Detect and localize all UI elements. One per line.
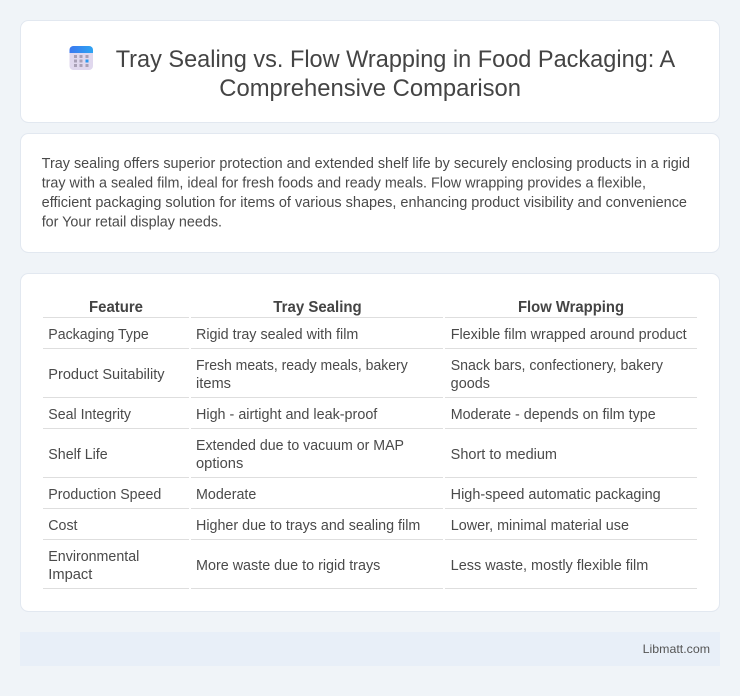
row: cost: Higher due to trays and sealing film bbox=[196, 518, 420, 534]
row: shelf life: Short to medium bbox=[451, 447, 557, 463]
row: cost: Cost bbox=[48, 518, 78, 534]
footer text: Libmatt.com bbox=[643, 642, 710, 656]
row: production speed bbox=[43, 487, 697, 509]
row: packaging type: Flexible film wrapped around product bbox=[451, 327, 687, 343]
panel: comparison table bbox=[20, 274, 720, 612]
row: cost: Lower, minimal material use bbox=[451, 518, 629, 534]
row: cost bbox=[43, 518, 697, 540]
icon: calendar bbox=[70, 46, 93, 70]
row: production speed: Production Speed bbox=[48, 487, 161, 503]
row: packaging type bbox=[43, 327, 697, 349]
text block: introduction: for Your retail display needs. bbox=[42, 214, 222, 230]
panel: footer bbox=[20, 632, 720, 666]
row: seal integrity bbox=[43, 407, 697, 429]
row: environmental impact: Environmental bbox=[48, 549, 139, 565]
row: packaging type: Rigid tray sealed with film bbox=[196, 327, 358, 343]
row: environmental impact: Less waste, mostly flexible film bbox=[451, 558, 648, 574]
row: product suitability: Fresh meats, ready meals, bakery bbox=[196, 358, 408, 374]
text block: introduction bbox=[42, 156, 690, 230]
row: seal integrity: Seal Integrity bbox=[48, 407, 132, 423]
table header: Flow Wrapping bbox=[518, 299, 624, 316]
table header bbox=[43, 299, 697, 318]
table header: Feature bbox=[89, 299, 143, 316]
title bbox=[116, 46, 675, 102]
text block: introduction: efficient packaging solution for items of various shapes, enhancing product visibility and convenience bbox=[42, 195, 687, 211]
panel: introduction bbox=[20, 134, 720, 252]
row: seal integrity: High - airtight and leak-proof bbox=[196, 407, 378, 423]
row: environmental impact: Impact bbox=[48, 567, 92, 583]
row: shelf life: Shelf Life bbox=[48, 447, 108, 463]
row: production speed: Moderate bbox=[196, 487, 256, 503]
row: shelf life bbox=[43, 438, 697, 478]
row: product suitability: goods bbox=[451, 376, 490, 392]
row: packaging type: Packaging Type bbox=[48, 327, 149, 343]
panel: header bbox=[20, 20, 720, 122]
row: shelf life: Extended due to vacuum or MAP bbox=[196, 438, 404, 454]
row: environmental impact: More waste due to rigid trays bbox=[196, 558, 380, 574]
text block: introduction: Tray sealing offers superior protection and extended shelf life by securely enclosing products in a rigid bbox=[42, 156, 690, 172]
row: production speed: High-speed automatic packaging bbox=[451, 487, 661, 503]
text block: introduction: tray with a sealed film, ideal for fresh foods and ready meals. Flow wrapping provides a flexible, bbox=[42, 176, 646, 192]
row: product suitability: Product Suitability bbox=[48, 367, 165, 383]
title: Comprehensive Comparison bbox=[219, 75, 521, 102]
table header: Tray Sealing bbox=[273, 299, 362, 316]
row: product suitability: Snack bars, confectionery, bakery bbox=[451, 358, 664, 374]
row: product suitability bbox=[43, 358, 697, 398]
title: Tray Sealing vs. Flow Wrapping in Food Packaging: A bbox=[116, 46, 675, 73]
row: environmental impact bbox=[43, 549, 697, 589]
row: product suitability: items bbox=[196, 376, 231, 392]
row: shelf life: options bbox=[196, 456, 243, 472]
row: seal integrity: Moderate - depends on film type bbox=[451, 407, 656, 423]
